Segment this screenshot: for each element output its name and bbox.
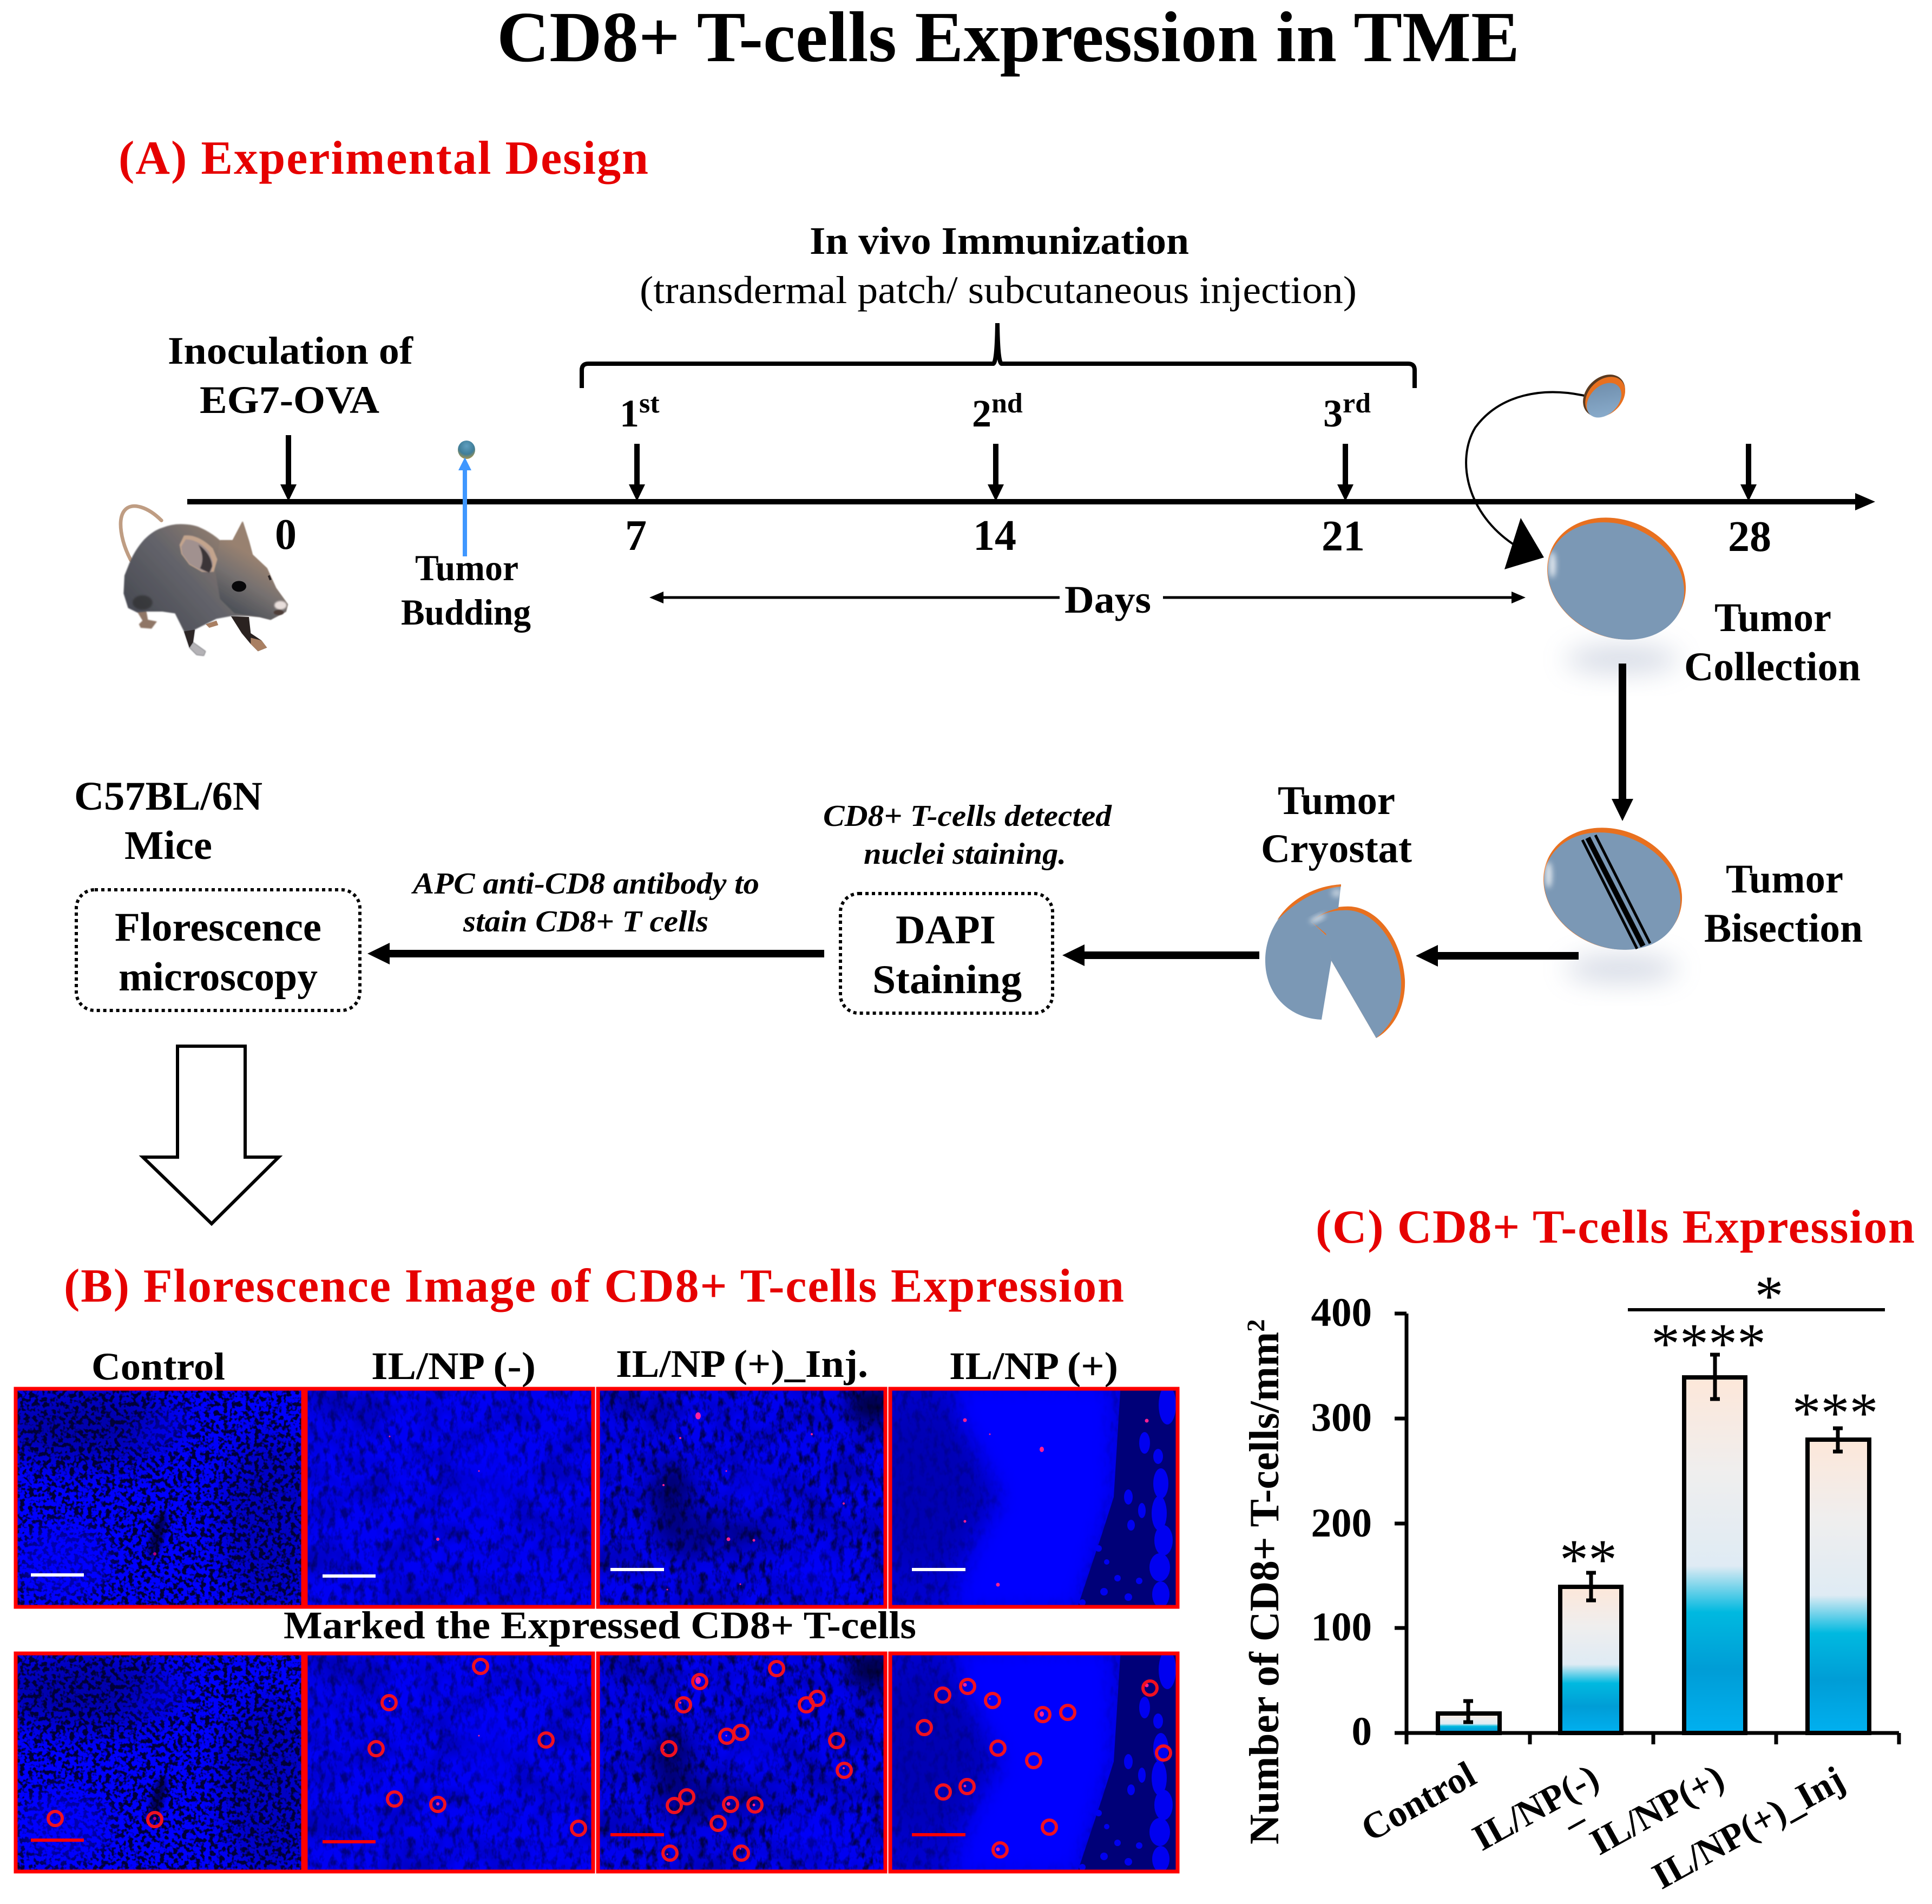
antibody note: stain CD8+ T cells [463,905,708,938]
x axis labels: Control [1354,1754,1482,1849]
tumor budding label: Tumor [415,547,518,588]
significance marks [1560,1264,1878,1591]
column labels: IL/NP (+) [949,1344,1118,1388]
image: marked control [0,1653,319,1881]
left arrow 3 [367,943,824,964]
mice label [74,774,262,868]
day labels: 21 [1322,513,1365,560]
image: marked IL/NP (+) [858,1648,1182,1875]
y axis title: 2 [1242,1319,1270,1332]
inoculation label: Inoculation of [168,329,413,372]
dose labels: nd [991,388,1023,419]
y axis tick labels: 200 [1311,1501,1372,1546]
icon: tumor bisection [1522,805,1702,972]
row caption: Marked the Expressed CD8+ T-cells [284,1604,916,1647]
tumor collection label [1684,595,1861,690]
DAPI staining box [840,894,1053,1013]
error bars [1463,1355,1843,1722]
tumor collection label: Tumor [1714,595,1831,640]
image: marked IL/NP (-) [306,1653,593,1872]
tumor cryostat label [1261,778,1412,871]
image: IL/NP (+)_Inj. [598,1386,896,1607]
panel: bar chart [1241,1201,1915,1897]
y axis tick labels [1311,1290,1372,1754]
immunization label: In vivo Immunization [810,219,1189,262]
tumor bisection label [1704,857,1863,951]
down arrow [1612,664,1633,821]
tumor cryostat label: Cryostat [1261,826,1412,871]
DAPI note: CD8+ T-cells detected [823,799,1112,833]
tumor budding label: Budding [401,592,531,633]
tumor collection label: Collection [1684,645,1861,690]
image row: marked [0,1648,1182,1881]
axes [1395,1314,1899,1744]
icon: tumor collection [1526,495,1706,662]
column labels [91,1342,1118,1388]
x axis labels: IL/NP(+)_Inj [1645,1758,1851,1897]
bar: IL/NP(+)_Inj [1808,1440,1869,1733]
dose labels [620,388,1371,435]
bar: control [1438,1713,1500,1733]
immunization label: (transdermal patch/ subcutaneous injection) [640,268,1357,312]
left arrow 2 [1062,944,1259,966]
heading B: (B) Florescence Image of CD8+ T-cells Expression [64,1260,1124,1312]
days arrow: Days [1064,578,1151,621]
shadow: tumor collection [1565,645,1679,673]
antibody note: APC anti-CD8 antibody to [411,867,759,901]
significance marks: * [1754,1264,1784,1328]
marker circles [48,1659,1171,1860]
dose labels: rd [1343,388,1371,419]
dose labels: 2 [972,392,991,435]
curved arrow [1466,392,1589,569]
significance marks: *** [1792,1381,1878,1445]
image: control [0,1389,319,1616]
significance marks: **** [1651,1312,1766,1375]
day labels: 28 [1728,513,1771,561]
timeline axis arrow [187,493,1875,510]
antibody note [411,867,759,938]
panel: fluorescence images [0,1260,1182,1881]
bar: IL/NP(-) [1560,1587,1621,1733]
fluorescence microscopy box: microscopy [119,955,318,1000]
x axis labels: IL/NP(+) [1583,1756,1731,1863]
column labels: IL/NP (+)_Inj. [616,1342,868,1386]
dose labels: st [639,388,660,419]
image: marked IL/NP (+)_Inj. [598,1651,896,1872]
fluorescence microscopy box: Florescence [115,905,321,950]
icon: tumor cryostat [1265,884,1405,1038]
column labels: Control [91,1345,225,1388]
significance marks: ** [1560,1528,1617,1591]
DAPI note: nuclei staining. [864,837,1066,871]
y axis tick labels: 300 [1311,1395,1372,1440]
day labels: 7 [625,512,647,560]
mice label: Mice [124,823,212,868]
y axis tick labels: 100 [1311,1605,1372,1650]
tumor budding label [401,547,531,633]
x axis labels [1354,1754,1851,1897]
y axis title: Number of CD8+ T-cells/mm [1241,1332,1287,1844]
DAPI staining box: Staining [872,957,1022,1002]
mice label: C57BL/6N [74,774,262,819]
tumor bisection label: Tumor [1726,857,1843,902]
image: IL/NP (-) [306,1389,593,1607]
tumor bisection label: Bisection [1704,906,1863,951]
timeline tick arrows [280,435,1757,501]
immunization label [640,219,1357,312]
dose labels: 3 [1323,392,1343,435]
column labels: IL/NP (-) [371,1344,536,1388]
heading A: (A) Experimental Design [119,132,648,185]
x axis labels: _ [1550,1787,1588,1833]
icon: small tumor [1575,366,1634,425]
inoculation label [168,329,413,422]
image row: raw [0,1383,1182,1616]
x axis labels: IL/NP(-) [1466,1756,1606,1859]
DAPI note [823,799,1112,871]
left arrow 1 [1416,945,1579,967]
image: IL/NP (+) [858,1383,1182,1611]
tumor cryostat label: Tumor [1278,778,1395,823]
immunization bracket [582,323,1415,388]
day labels [275,511,1771,561]
bars [1438,1377,1869,1733]
dose labels: 1 [620,392,639,435]
significance line [1628,1308,1885,1311]
hollow down arrow [143,1046,279,1224]
icon: mouse [121,506,288,656]
icon: tumor bud [458,441,475,459]
heading C: (C) CD8+ T-cells Expression [1316,1201,1915,1253]
bar: IL/NP(+) [1684,1377,1745,1733]
y axis tick labels: 400 [1311,1290,1372,1335]
panel: experimental design [74,132,1875,1224]
day labels: 0 [275,511,297,559]
shadow: tumor bisection [1565,955,1679,983]
inoculation label: EG7-OVA [200,378,379,422]
DAPI staining box: DAPI [896,908,996,953]
days arrow [649,578,1526,621]
day labels: 14 [973,512,1016,560]
y axis tick labels: 0 [1352,1709,1372,1754]
blue arrow [458,457,471,556]
fluorescence microscopy box [76,890,360,1010]
